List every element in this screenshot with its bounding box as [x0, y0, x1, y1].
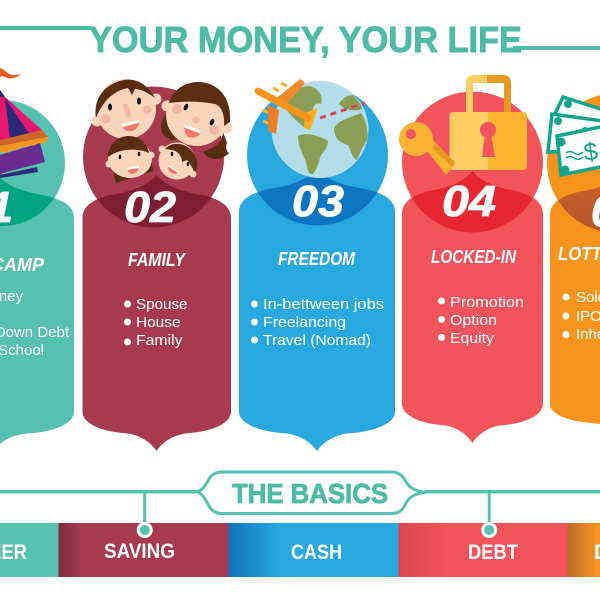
list: locked-in items: Promotion	[450, 294, 524, 311]
icon: circus tent	[0, 68, 48, 178]
heading: locked-in: LOCKED-IN	[431, 247, 517, 267]
bar: cash	[228, 523, 398, 577]
bar: debt: DEBT	[468, 541, 518, 564]
icon: mother	[161, 82, 232, 159]
list: camp items	[0, 288, 70, 359]
list: family items	[124, 296, 188, 349]
list: freedom items: Freelancing	[263, 314, 346, 331]
icon: padlock	[450, 75, 527, 170]
bar: orange	[568, 523, 600, 577]
icon: banknotes: $	[582, 137, 600, 167]
icon: globe with plane	[258, 79, 368, 178]
icon: father	[92, 79, 162, 139]
panel: column 2 family	[82, 79, 232, 451]
list: family items: Spouse	[136, 296, 188, 313]
list: freedom items	[251, 296, 384, 349]
panel: column 3 freedom	[239, 79, 395, 451]
list: locked-in items: Equity	[450, 330, 495, 347]
heading: freedom: FREEDOM	[278, 249, 356, 269]
number 02: 02	[124, 183, 177, 232]
list: locked-in items: Option	[450, 312, 497, 329]
list: freedom items: In-bettween jobs	[263, 296, 384, 313]
icon: key	[399, 122, 456, 175]
icon: plane	[258, 79, 318, 134]
connector: saving	[138, 491, 151, 536]
number 04: 04	[442, 177, 496, 226]
panel: column 4 locked-in	[399, 75, 543, 443]
heading: the basics: THE BASICS	[232, 478, 388, 509]
heading: the basics	[0, 472, 600, 514]
title: YOUR MONEY, YOUR LIFE	[89, 19, 522, 60]
bar: career	[0, 523, 58, 577]
icon: family faces	[92, 79, 232, 183]
route: dashed flight line	[320, 103, 365, 118]
list: family items: House	[136, 314, 180, 331]
icon: banknotes	[548, 97, 600, 175]
list: lottery items	[562, 289, 600, 343]
list: locked-in items	[438, 294, 524, 347]
number 03: 03	[292, 177, 344, 226]
list: freedom items: Travel (Nomad)	[263, 332, 371, 349]
heading: family: FAMILY	[128, 250, 187, 270]
panel: column 5 lottery	[547, 93, 600, 440]
bar: saving	[58, 523, 228, 577]
panel: column 1 camp	[0, 68, 74, 447]
bar: saving: SAVING	[104, 540, 175, 563]
connector: debt	[483, 491, 496, 536]
icon: son	[158, 142, 197, 180]
bar: cash: CASH	[291, 541, 342, 564]
list: family items: Family	[136, 332, 183, 349]
icon: daughter	[106, 136, 154, 183]
bar: debt	[398, 523, 568, 577]
